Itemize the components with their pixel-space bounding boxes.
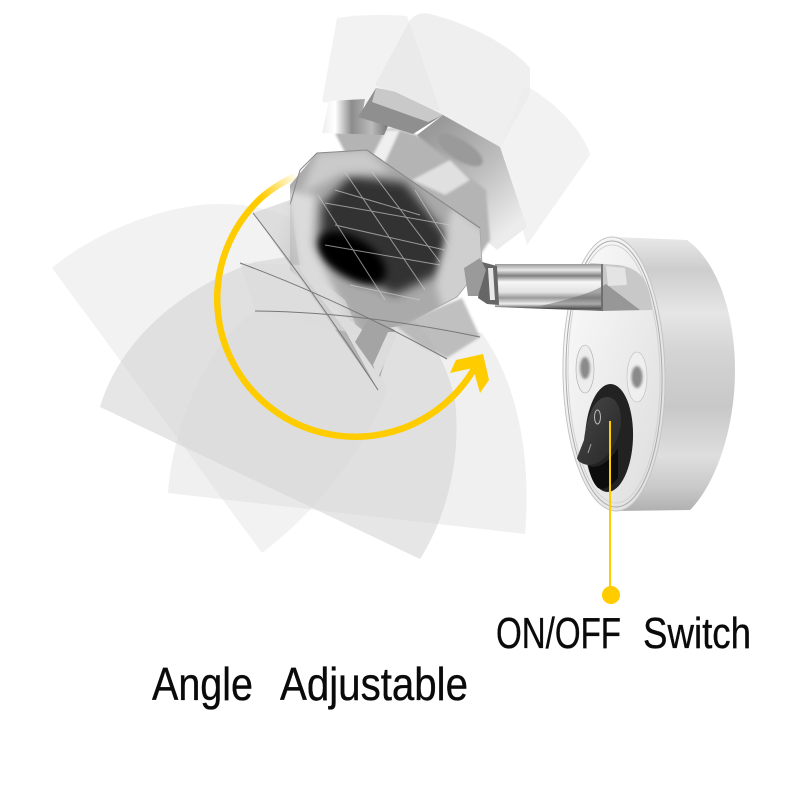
LED right bbox=[627, 352, 647, 402]
lamp swing ghost positions bbox=[52, 13, 590, 559]
switch callout bbox=[496, 421, 751, 658]
base front face bbox=[561, 236, 667, 512]
lower shade interior bbox=[253, 200, 378, 390]
label: angle adjustable: Adjustable bbox=[280, 658, 468, 710]
ghost shade: lower centre bbox=[168, 311, 527, 534]
shade rim lines bbox=[240, 213, 480, 390]
shade bell behind bbox=[417, 115, 527, 250]
wall lamp base bbox=[464, 236, 735, 512]
label: angle adjustable: Angle bbox=[152, 658, 253, 710]
metal collar front bbox=[358, 88, 443, 134]
ghost shade: top centre bbox=[375, 13, 530, 147]
lens rim bbox=[290, 150, 480, 228]
rotation arrow bbox=[217, 175, 489, 437]
metal collar rear bbox=[322, 99, 388, 135]
ghost shade: top right bbox=[500, 85, 590, 245]
arm bbox=[464, 258, 652, 311]
leader line bbox=[609, 421, 611, 595]
rocker switch bbox=[577, 383, 635, 493]
switch markings bbox=[594, 410, 600, 424]
label: on/off switch: Switch bbox=[643, 609, 751, 658]
dark core bbox=[290, 150, 482, 326]
lens lattice bbox=[318, 172, 450, 300]
lens body bbox=[290, 150, 482, 332]
base cylinder bbox=[612, 237, 735, 511]
neck blur bbox=[335, 128, 490, 270]
lamp head motion blur bbox=[240, 88, 527, 390]
ghost shade: top left bbox=[322, 15, 440, 110]
label: on/off switch: ON/OFF bbox=[496, 609, 621, 658]
leader dot bbox=[602, 586, 620, 604]
LED left bbox=[576, 345, 594, 393]
ghost shade: lower left bbox=[100, 250, 457, 559]
ghost shade: lower far left bbox=[52, 204, 387, 553]
metal fragment bbox=[355, 318, 395, 377]
